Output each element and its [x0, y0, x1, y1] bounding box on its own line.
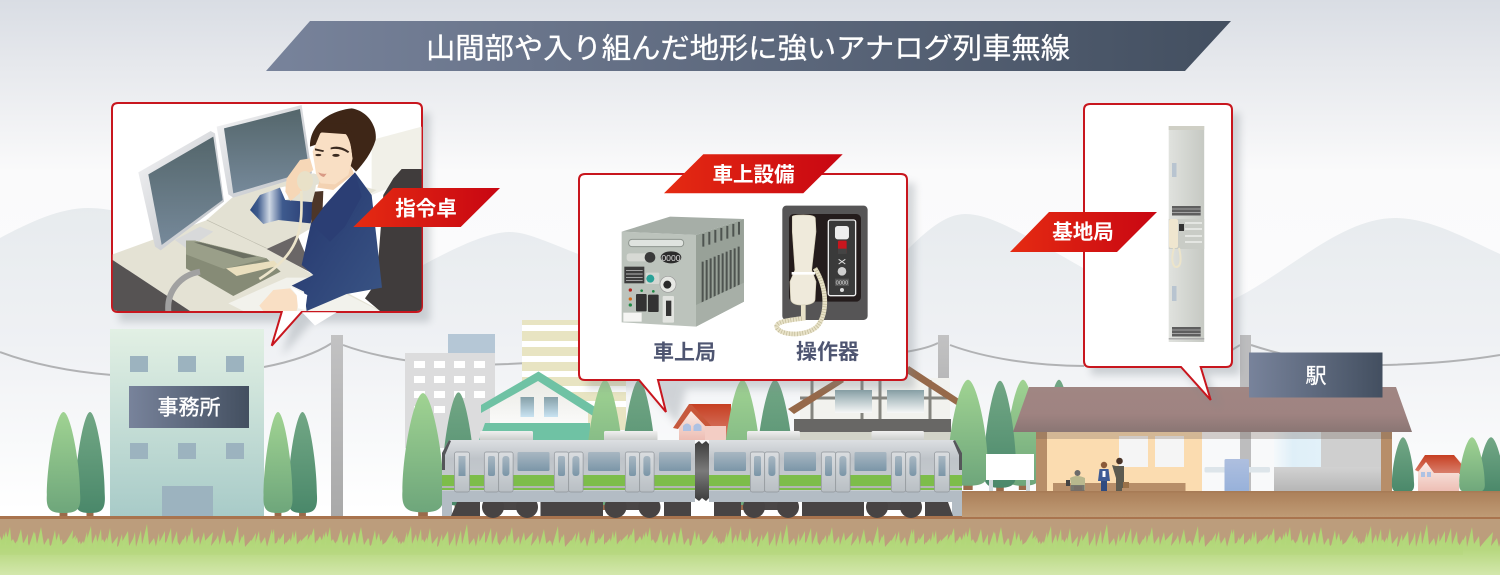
half-timbered building [788, 366, 962, 441]
cable [168, 272, 200, 312]
background gray building [405, 334, 495, 448]
windows [518, 452, 886, 471]
support pole [1240, 335, 1251, 395]
grass [0, 524, 1500, 575]
office sign: 事務所 [158, 396, 220, 420]
trees behind station [948, 380, 1074, 492]
lapel [340, 172, 356, 188]
hair back [310, 108, 376, 172]
face [313, 132, 353, 184]
lower hand [259, 286, 307, 311]
icon: base station cabinet [1169, 126, 1204, 342]
panel: onboard equipment [579, 154, 915, 425]
shirt and tie [280, 180, 347, 224]
train [442, 431, 962, 518]
phone and cord [259, 171, 313, 279]
background cream building [522, 320, 626, 430]
station roof [1013, 387, 1412, 432]
icon: operator unit [777, 206, 868, 334]
chair [365, 169, 422, 311]
utility poles [331, 335, 949, 517]
office building [110, 329, 264, 517]
platform [962, 491, 1500, 519]
green roof house [479, 372, 600, 440]
label: 指令卓 [353, 188, 500, 227]
monitors [138, 105, 312, 250]
billboard [986, 454, 1034, 492]
gangway [695, 441, 709, 501]
label: 車上局: 車上局 [653, 342, 716, 364]
station name sign [1249, 352, 1382, 398]
car bodies [442, 440, 962, 502]
label: 車上設備 [664, 154, 843, 193]
station [1013, 335, 1412, 492]
hand on phone [285, 158, 313, 201]
jacket [292, 172, 382, 311]
illustration: dispatcher [113, 105, 422, 326]
station name sign: 駅 [1306, 365, 1326, 388]
panel: dispatcher console [112, 103, 500, 356]
desk [113, 173, 382, 311]
power lines [0, 343, 1500, 375]
label: 基地局: 基地局 [1052, 221, 1114, 244]
mountains [0, 208, 1500, 520]
undercarriage [442, 496, 962, 518]
paper [228, 278, 380, 311]
station walls [1036, 432, 1392, 492]
label: 指令卓: 指令卓 [395, 198, 457, 220]
ticket gate [1204, 459, 1270, 492]
right side scenery [1392, 437, 1500, 495]
headline banner [266, 21, 1231, 71]
icon: operator unit: 0000 [836, 281, 848, 287]
icon: onboard radio unit: 0000 [661, 253, 681, 263]
bench [1053, 483, 1186, 492]
console [186, 241, 281, 296]
panel: base station [1010, 104, 1240, 410]
label: 操作器: 操作器 [796, 341, 859, 364]
fringe [320, 132, 353, 158]
roof units [480, 431, 924, 441]
wall [372, 127, 422, 195]
icon: onboard radio unit [622, 217, 744, 327]
ground track bed [0, 516, 1500, 575]
trees by office [47, 412, 317, 517]
neck [317, 165, 354, 190]
raised arm [250, 188, 315, 224]
red roof house [673, 404, 731, 440]
doors [454, 452, 950, 492]
headline banner: 山間部や入り組んだ地形に強いアナログ列車無線 [426, 33, 1070, 65]
office sign [129, 386, 249, 428]
passengers [1066, 458, 1129, 492]
mouth [318, 172, 327, 177]
eyes [315, 147, 349, 157]
label: 車上設備: 車上設備 [712, 164, 794, 186]
label: 基地局 [1010, 212, 1157, 252]
trees around train [402, 380, 795, 517]
